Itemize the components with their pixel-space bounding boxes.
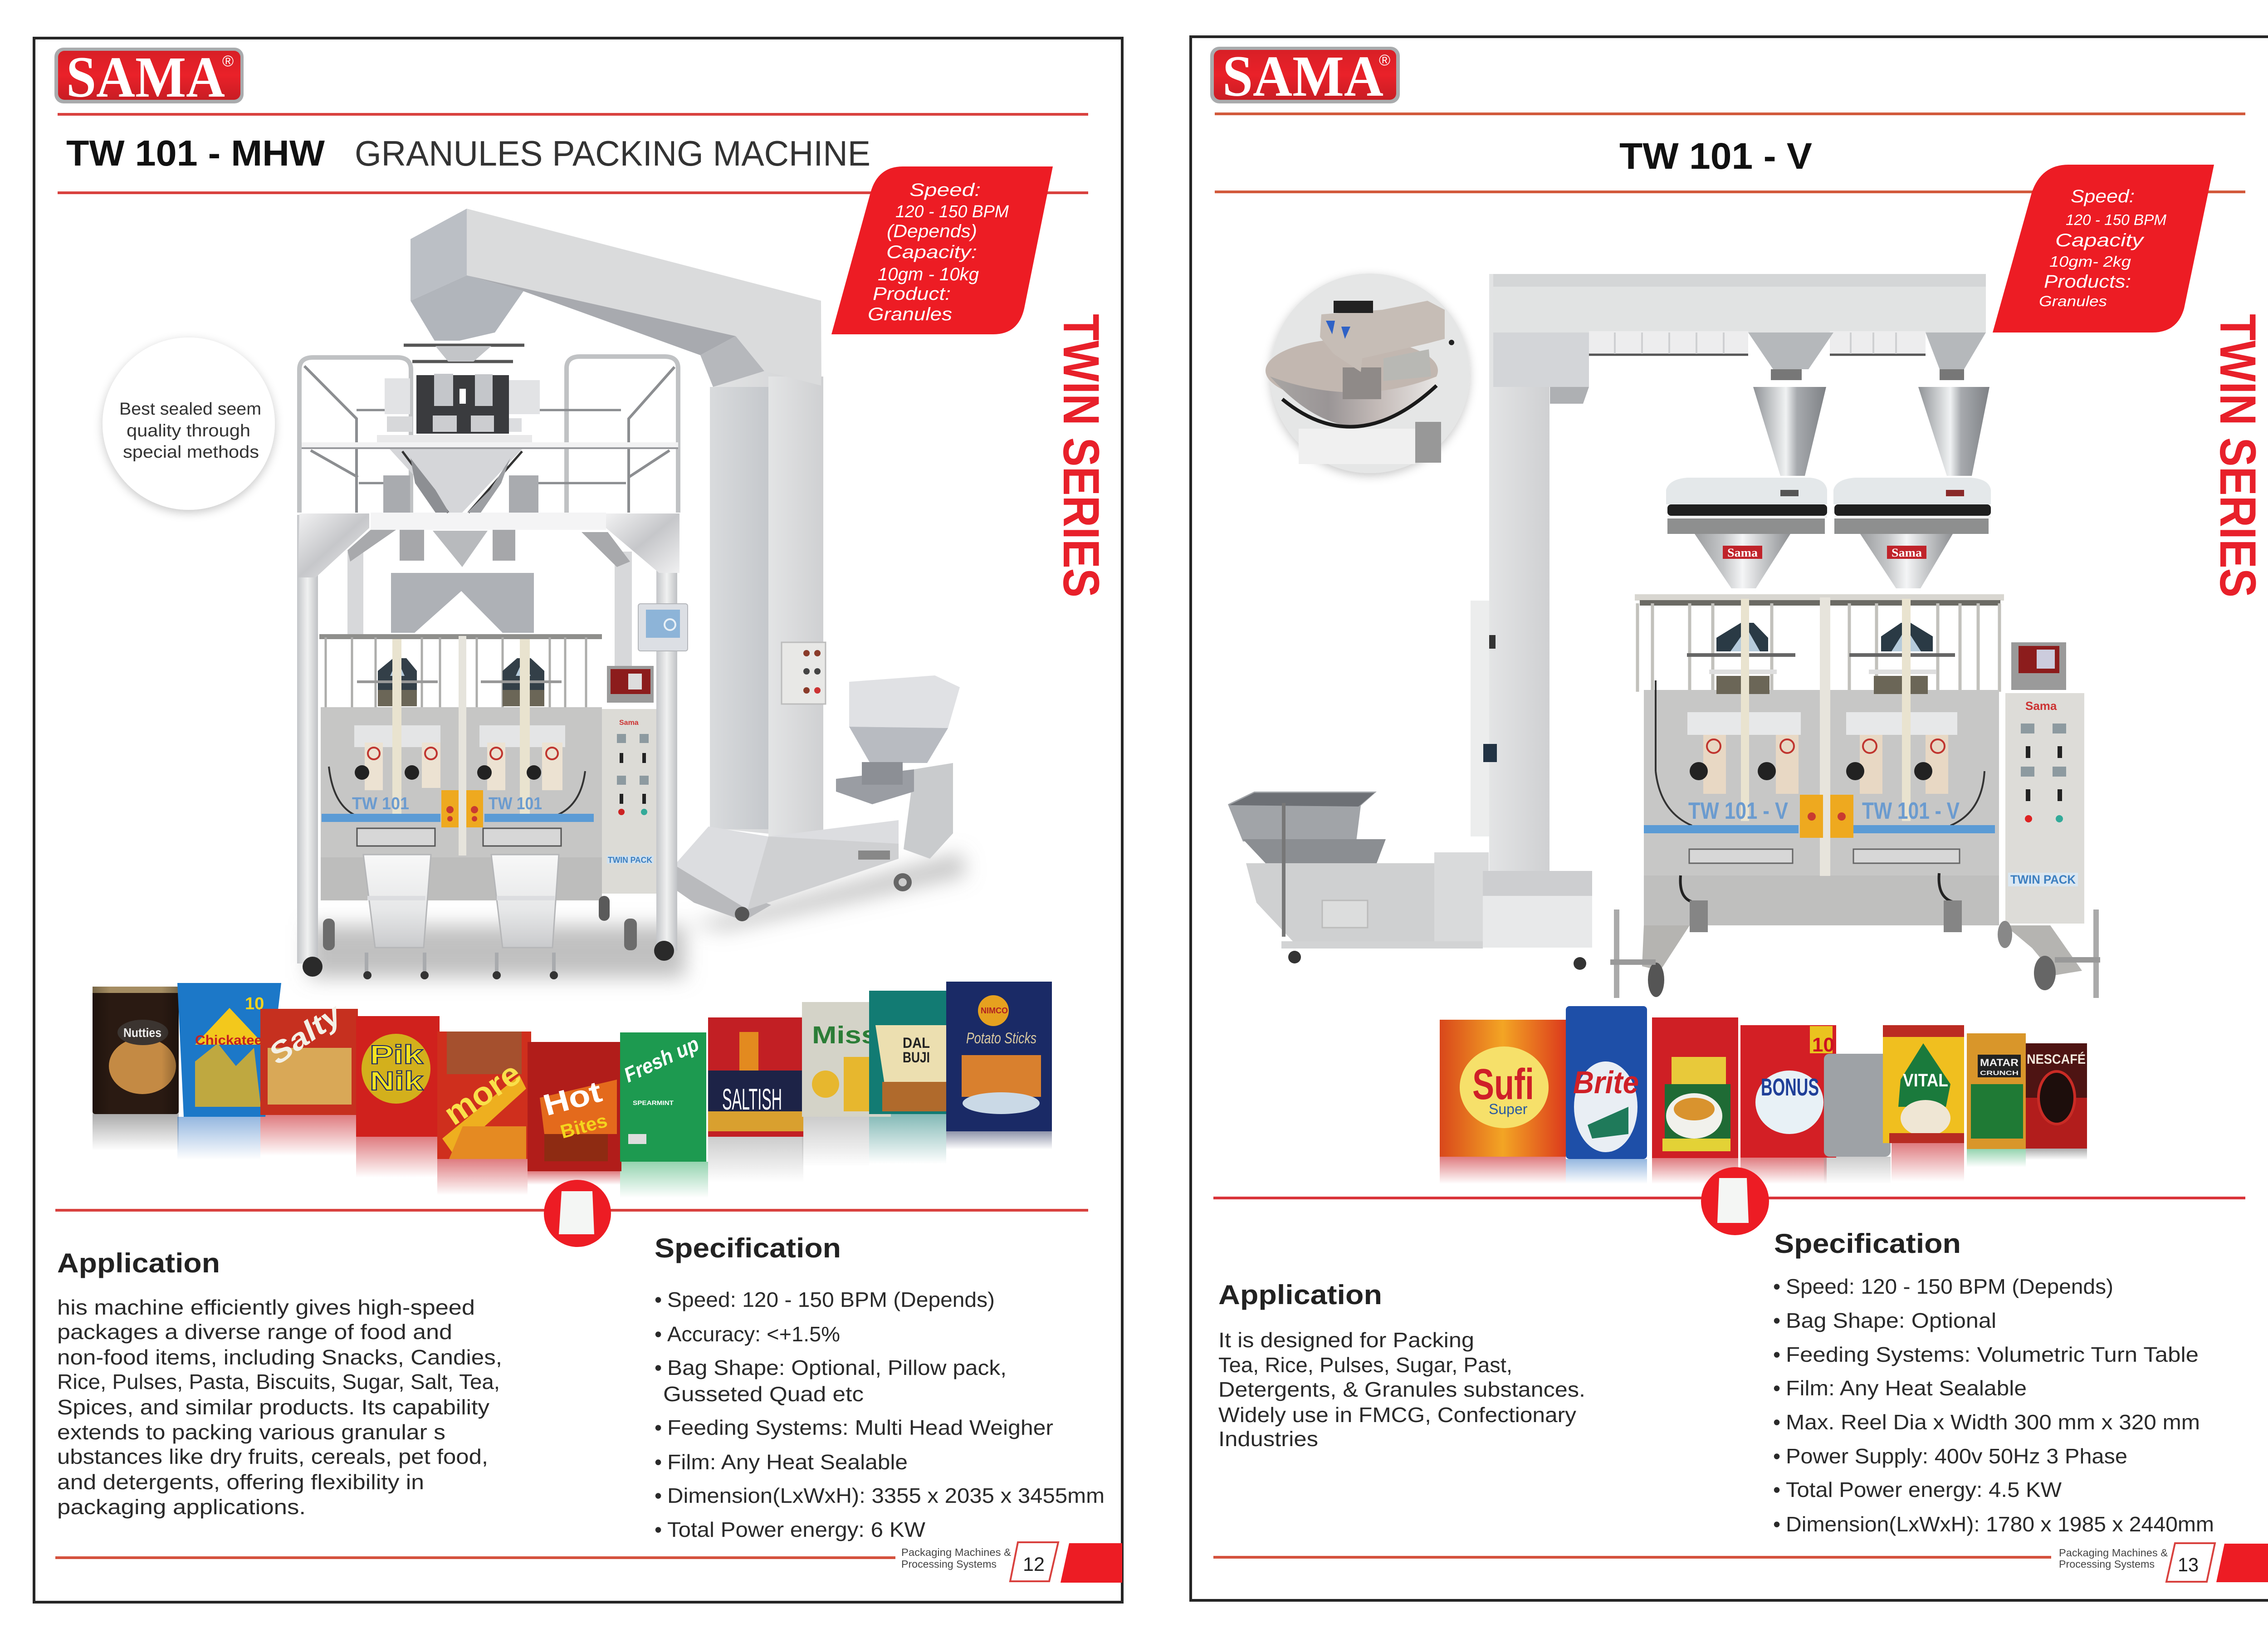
bag: Matar Crunch xyxy=(1967,1033,2026,1149)
specification list: Bag Shape: Optional, Pillow pack, xyxy=(667,1356,1007,1379)
callout bubble: quality through xyxy=(127,421,250,440)
bag: Pik Nik: Pik xyxy=(370,1040,424,1070)
control panel: Sama xyxy=(619,719,639,727)
packing unit body xyxy=(1635,594,2004,932)
specification list: • xyxy=(655,1518,662,1541)
red display xyxy=(607,666,654,703)
bag: Hot Bites xyxy=(528,1042,621,1171)
application text: Application xyxy=(57,1248,220,1278)
bag: Saltish xyxy=(708,1017,803,1137)
application text: Application xyxy=(1218,1280,1382,1310)
specification list: Accuracy: <+1.5% xyxy=(667,1322,840,1346)
footer xyxy=(55,1542,1122,1583)
application text: Rice, Pulses, Pasta, Biscuits, Sugar, Salt, Tea, xyxy=(57,1370,500,1393)
bag: Dal Buji: BUJI xyxy=(903,1049,930,1066)
bag: Vital xyxy=(1883,1025,1964,1143)
bag: Saltish: SALTISH xyxy=(722,1082,782,1116)
specs tag: Granules xyxy=(868,304,952,324)
specs tag: 120 - 150 BPM xyxy=(2066,211,2167,228)
specs tag xyxy=(831,166,1053,334)
series label: TWIN SERIES xyxy=(1053,314,1110,597)
application text: Industries xyxy=(1218,1427,1318,1451)
specs tag: Granules xyxy=(2039,293,2107,309)
title: GRANULES PACKING MACHINE xyxy=(355,133,870,173)
specification list: Specification xyxy=(655,1233,841,1263)
bag: Nutties: Nutties xyxy=(123,1026,161,1040)
bag: Pik Nik xyxy=(356,1016,440,1137)
control panel xyxy=(2005,693,2084,924)
bucket elevator xyxy=(411,209,899,921)
bag: Bonus: 10 xyxy=(1812,1034,1834,1056)
bag: Chickatee: 10 xyxy=(245,994,264,1013)
bag: Dal Buji: DAL xyxy=(903,1035,930,1051)
application text: It is designed for Packing xyxy=(1218,1328,1474,1352)
logo: SAMA: SAMA xyxy=(1222,44,1383,108)
control panel: Sama xyxy=(2025,699,2057,713)
footer: Processing Systems xyxy=(2059,1558,2155,1570)
bag: Potato Sticks: Potato Sticks xyxy=(966,1030,1036,1047)
specification list: • xyxy=(1773,1343,1780,1366)
specification list: Bag Shape: Optional xyxy=(1786,1309,1996,1332)
specification list: • xyxy=(655,1288,662,1311)
bag: silver pouch xyxy=(1824,1054,1891,1157)
callout bubble: Best sealed seem xyxy=(119,400,261,419)
bag: Bonus: BONUS xyxy=(1761,1074,1819,1101)
footer: 12 xyxy=(1023,1554,1045,1575)
specification list: Specification xyxy=(1774,1228,1961,1259)
bag: Salty xyxy=(260,997,358,1115)
bag: Nescafe: NESCAFÉ xyxy=(2027,1051,2086,1067)
lower funnels: Sama xyxy=(1727,546,1758,559)
specification list: Gusseted Quad etc xyxy=(663,1382,864,1406)
specification list: Dimension(LxWxH): 3355 x 2035 x 3455mm xyxy=(667,1484,1105,1507)
elevator with conveyor xyxy=(1471,274,1986,895)
multi head weigher xyxy=(377,346,540,513)
specs tag: Product: xyxy=(873,284,951,304)
page 1: TW 101 - MHW xyxy=(34,38,1122,1602)
specs tag: Products: xyxy=(2044,272,2131,292)
specification list: Power Supply: 400v 50Hz 3 Phase xyxy=(1786,1444,2127,1468)
bag: Chickatee: Chickatee xyxy=(195,1033,262,1048)
specification list: Film: Any Heat Sealable xyxy=(1786,1376,2027,1400)
title: TW 101 - V xyxy=(1619,136,1812,177)
page 1 border xyxy=(34,38,1122,1602)
feed hoppers xyxy=(1748,332,1986,380)
application text: his machine efficiently gives high-speed xyxy=(57,1296,475,1319)
specification list: • xyxy=(1773,1410,1780,1434)
application text: Tea, Rice, Pulses, Sugar, Past, xyxy=(1218,1353,1512,1377)
bag: Sufi: Sufi xyxy=(1472,1060,1534,1109)
packing unit body: TW 101 xyxy=(489,794,542,813)
bag: Vital: VITAL xyxy=(1903,1071,1948,1090)
specification list xyxy=(655,1233,1105,1541)
specs tag xyxy=(1993,165,2214,332)
specification list xyxy=(1773,1228,2214,1536)
packing unit body: TW 101 xyxy=(352,794,409,813)
bag: Brite: Brite xyxy=(1573,1065,1639,1100)
page 2 border xyxy=(1191,37,2268,1600)
section rule xyxy=(55,1209,1088,1212)
bag: Pik Nik: Nik xyxy=(370,1066,424,1096)
callout bubble xyxy=(103,337,275,510)
product bags row xyxy=(93,982,1052,1198)
red display xyxy=(2011,642,2066,690)
specification list: • xyxy=(655,1484,662,1507)
specs tag: Capacity xyxy=(2055,230,2145,250)
packing unit body xyxy=(319,634,602,900)
application text: non-food items, including Snacks, Candies, xyxy=(57,1345,502,1369)
specification list: • xyxy=(1773,1376,1780,1400)
footer xyxy=(1213,1543,2268,1582)
specification list: • xyxy=(1773,1512,1780,1536)
bag: Potato Sticks xyxy=(946,982,1052,1131)
floor shadow xyxy=(308,853,966,978)
bag: Hot Bites: Hot xyxy=(539,1074,605,1122)
wheels and feet xyxy=(303,896,674,977)
control panel: TWIN PACK xyxy=(608,856,652,865)
footer: Packaging Machines & xyxy=(2059,1547,2168,1559)
logo: SAMA: ® xyxy=(1379,52,1390,69)
specification list: • xyxy=(655,1356,662,1379)
callout bubble: special methods xyxy=(123,443,259,462)
bag: Potato Sticks: NIMCO xyxy=(981,1006,1008,1015)
floor feeder xyxy=(1228,792,1592,970)
series label: TWIN SERIES xyxy=(2209,314,2266,597)
logo: SAMA: SAMA xyxy=(66,45,225,109)
specification list: • xyxy=(655,1416,662,1439)
reflections xyxy=(93,1114,1052,1198)
product bags row xyxy=(1440,1006,2087,1184)
bag chutes xyxy=(363,855,559,979)
specification list: • xyxy=(1773,1478,1780,1501)
lower funnels xyxy=(1695,534,1953,588)
specification list: Speed: 120 - 150 BPM (Depends) xyxy=(1786,1275,2113,1298)
feed hopper xyxy=(836,675,960,891)
specification list: • xyxy=(1773,1309,1780,1332)
section rule xyxy=(1213,1197,2245,1199)
bag: Fresh up: SPEARMINT xyxy=(633,1099,674,1106)
bag: Chickatee xyxy=(177,983,281,1117)
application text: packaging applications. xyxy=(57,1495,306,1519)
bag: More xyxy=(437,1032,531,1159)
specs tag: Capacity: xyxy=(886,242,977,262)
lower funnels: Sama xyxy=(1892,546,1922,559)
packing unit body: TW 101 - V xyxy=(1688,798,1788,824)
bag: tea xyxy=(1652,1017,1738,1158)
bag: Fresh up xyxy=(620,1032,706,1162)
footer: Processing Systems xyxy=(901,1558,997,1570)
specs tag: Speed: xyxy=(2071,186,2135,206)
specification list: Feeding Systems: Volumetric Turn Table xyxy=(1786,1343,2199,1366)
legs and wheels xyxy=(1610,909,2100,998)
specs tag: 10gm- 2kg xyxy=(2049,253,2131,270)
application text: Detergents, & Granules substances. xyxy=(1218,1378,1585,1401)
specification list: • xyxy=(655,1450,662,1474)
specification list: Dimension(LxWxH): 1780 x 1985 x 2440mm xyxy=(1786,1512,2214,1536)
bag: Salty: Salty xyxy=(263,997,349,1071)
page 2 header rules xyxy=(1215,112,2245,193)
packing unit body: TW 101 - V xyxy=(1862,798,1960,824)
touch screen xyxy=(638,604,688,651)
detail circle: turn table xyxy=(1266,274,1470,473)
bag: More: more xyxy=(437,1055,528,1132)
bag: Matar Crunch: CRUNCH xyxy=(1980,1069,2019,1076)
specification list: Max. Reel Dia x Width 300 mm x 320 mm xyxy=(1786,1410,2200,1434)
specification list: Total Power energy: 6 KW xyxy=(667,1518,926,1541)
bag: Matar Crunch: MATAR xyxy=(1980,1057,2019,1068)
application text: Widely use in FMCG, Confectionary xyxy=(1218,1403,1576,1427)
title: TW 101 - MHW xyxy=(66,133,325,173)
bag: Nutties xyxy=(93,987,179,1114)
specification list: • xyxy=(1773,1275,1780,1298)
reflections xyxy=(1440,1143,2087,1184)
footer: 13 xyxy=(2178,1554,2199,1576)
specs tag: 10gm - 10kg xyxy=(878,264,979,284)
specification list: Total Power energy: 4.5 KW xyxy=(1786,1478,2062,1501)
machine: volumetric twin packer xyxy=(1228,274,2100,998)
logo: SAMA: ® xyxy=(222,53,234,70)
icon: bag in circle xyxy=(544,1180,611,1247)
top weigher platform xyxy=(299,345,678,513)
application text xyxy=(1218,1280,1585,1451)
specification list: • xyxy=(655,1322,662,1346)
elevator control box xyxy=(782,642,826,704)
bag: Bonus xyxy=(1740,1025,1836,1158)
application text xyxy=(57,1248,502,1519)
application text: ubstances like dry fruits, cereals, pet food, xyxy=(57,1445,488,1468)
specs tag: Speed: xyxy=(909,180,981,200)
bag: Nescafe xyxy=(2026,1043,2087,1149)
application text: extends to packing various granular s xyxy=(57,1420,445,1444)
bag: snack mix xyxy=(802,1002,891,1117)
footer: Packaging Machines & xyxy=(901,1546,1011,1558)
support frame xyxy=(297,513,679,963)
bag: snack mix: Miss xyxy=(812,1022,878,1049)
specs tag: (Depends) xyxy=(887,221,977,241)
bag: Hot Bites: Bites xyxy=(558,1110,610,1143)
page 2: TW 101 - V xyxy=(1191,37,2268,1600)
specification list: • xyxy=(1773,1444,1780,1468)
specification list: Film: Any Heat Sealable xyxy=(667,1450,908,1474)
specification list: Speed: 120 - 150 BPM (Depends) xyxy=(667,1288,995,1311)
bag: Dal Buji xyxy=(869,991,968,1114)
application text: Spices, and similar products. Its capability xyxy=(57,1395,489,1419)
page 1 header rules xyxy=(58,113,1088,194)
title xyxy=(66,133,870,173)
specification list: Feeding Systems: Multi Head Weigher xyxy=(667,1416,1053,1439)
application text: packages a diverse range of food and xyxy=(57,1320,452,1344)
bag: Sufi xyxy=(1440,1020,1566,1157)
control panel xyxy=(602,709,656,894)
volumetric cones xyxy=(1753,387,1989,476)
control panel: TWIN PACK xyxy=(2010,873,2076,886)
icon: bag in circle xyxy=(1701,1167,1769,1235)
bag: Sufi: Super xyxy=(1489,1101,1528,1117)
turn tables xyxy=(1666,478,1991,534)
application text: and detergents, offering flexibility in xyxy=(57,1470,424,1494)
bag: Fresh up: Fresh up xyxy=(620,1032,703,1087)
bag: Brite xyxy=(1566,1006,1647,1159)
specs tag: 120 - 150 BPM xyxy=(895,202,1009,221)
machine: multi head weigher twin packer xyxy=(297,209,966,979)
